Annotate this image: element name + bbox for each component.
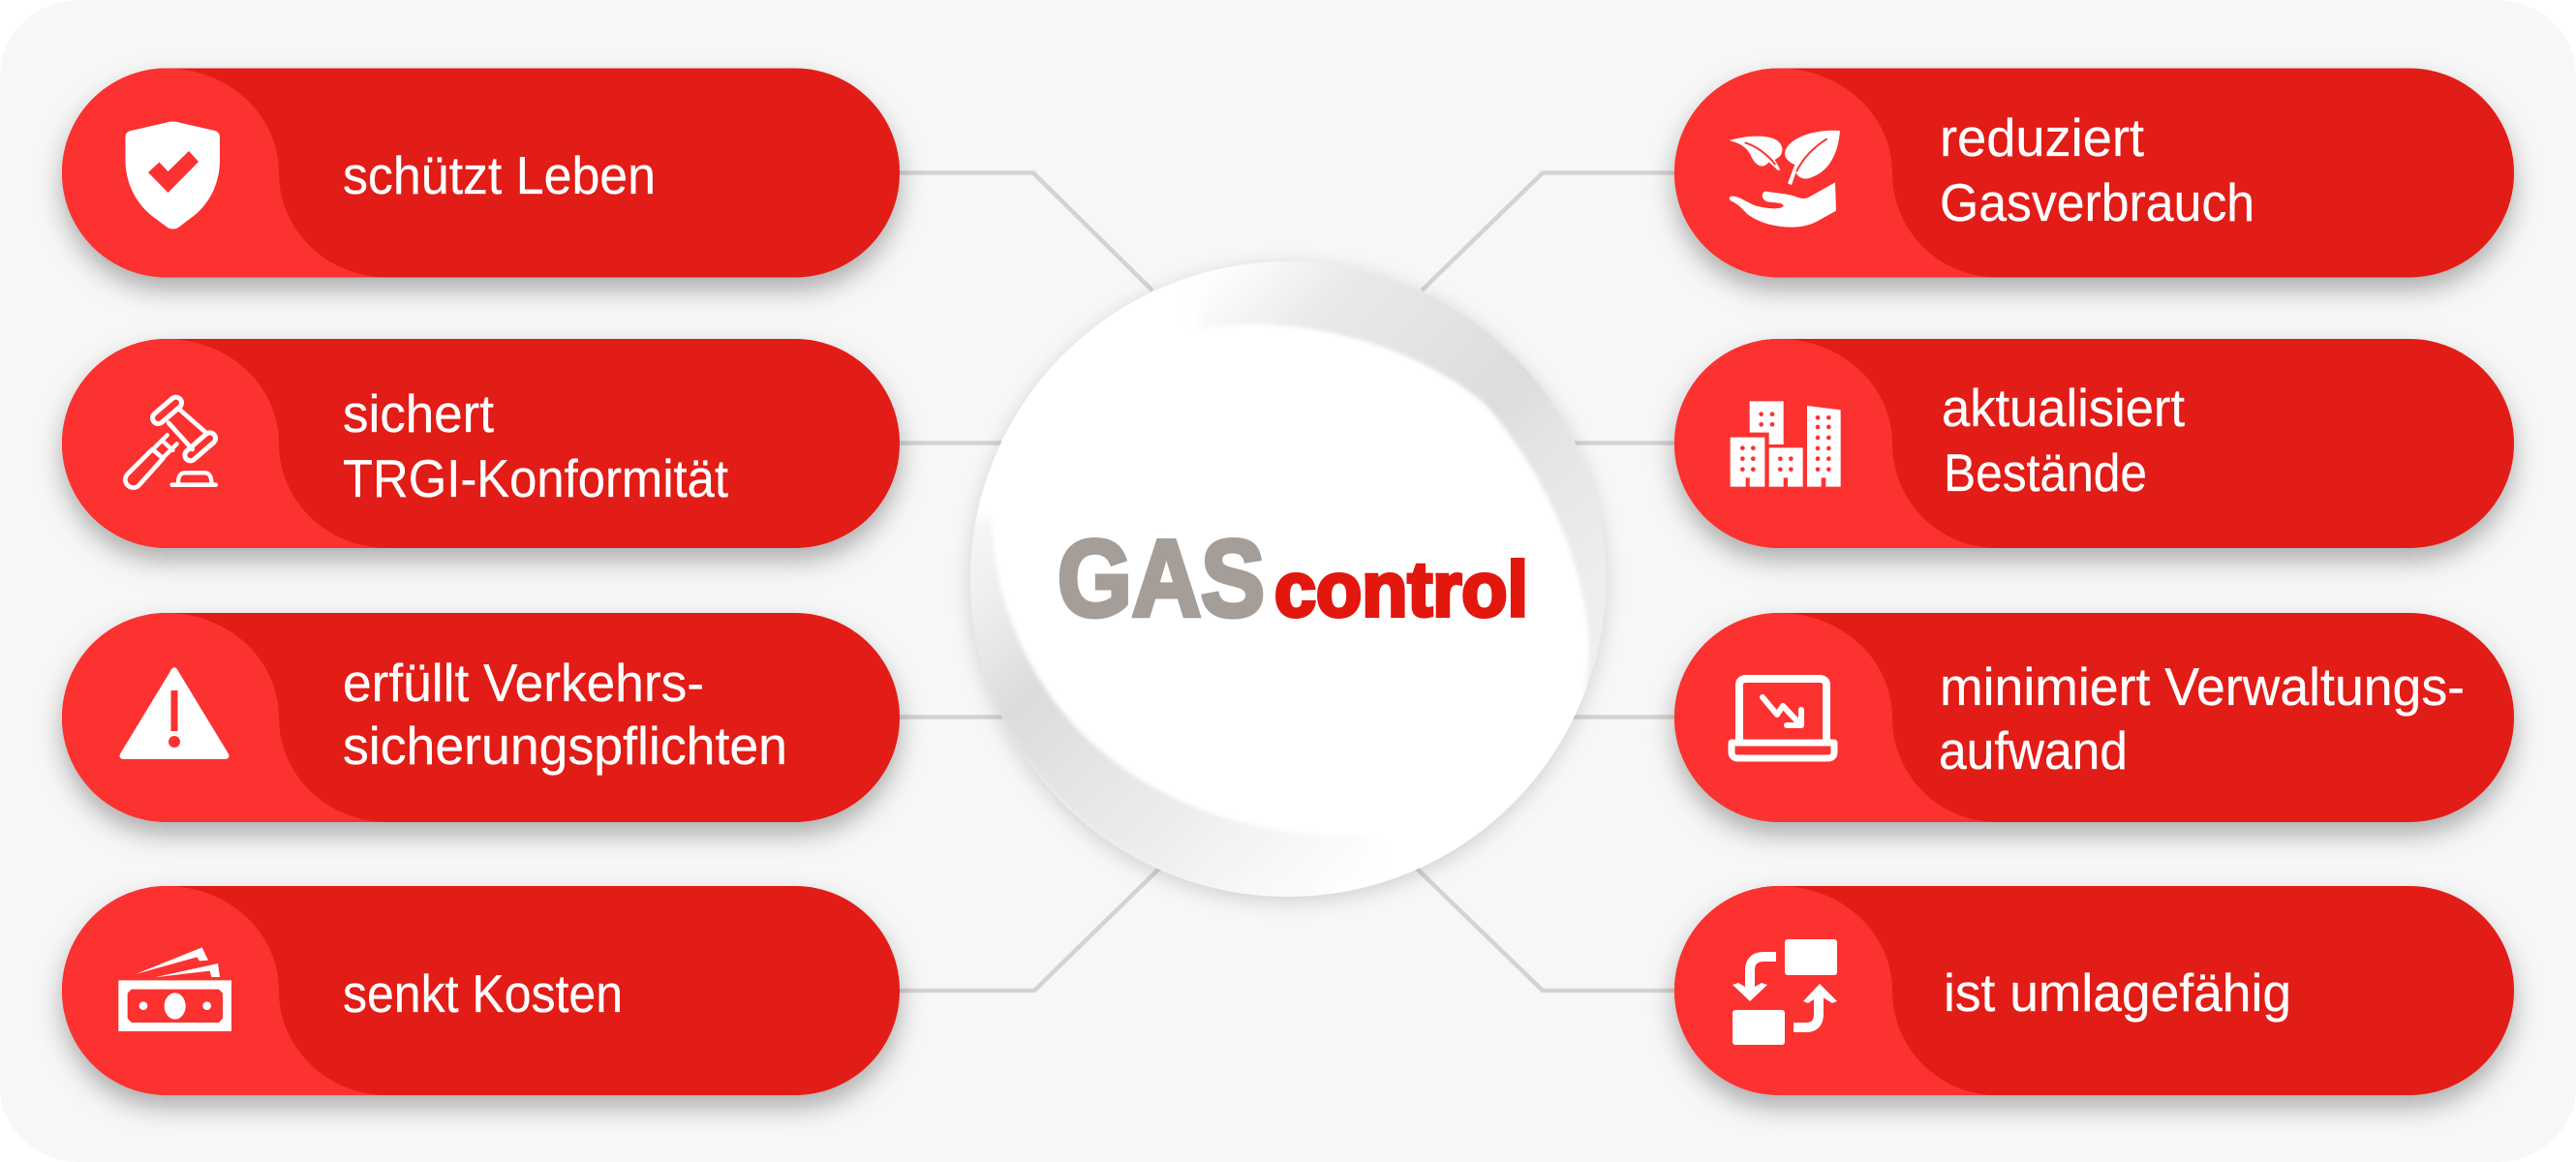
icon: banknotes <box>118 947 231 1031</box>
panel: aktualisiert Bestände <box>1674 339 2514 548</box>
panel: reduziert Gasverbrauch <box>1674 68 2514 277</box>
icon: laptop with falling chart <box>1732 679 1834 758</box>
label: reduziert <box>1940 107 2144 168</box>
panel: senkt Kosten <box>62 886 900 1095</box>
label <box>1939 657 2465 780</box>
logo: control <box>1274 546 1528 632</box>
connector lines <box>896 172 1680 991</box>
label: sicherungspflichten <box>343 716 787 776</box>
label: sichert <box>343 383 494 443</box>
icon: gavel <box>125 403 216 488</box>
panel: ist umlagefähig <box>1674 886 2514 1095</box>
label: Gasverbrauch <box>1940 172 2254 232</box>
label <box>1942 378 2185 503</box>
label: ist umlagefähig <box>1944 963 2291 1023</box>
panel: erfüllt Verkehrssicherungspflichten <box>62 613 900 822</box>
label: aufwand <box>1939 720 2128 780</box>
label: senkt Kosten <box>343 963 623 1024</box>
logo <box>1058 518 1528 639</box>
logo: GAS <box>1058 518 1265 639</box>
label: erfüllt Verkehrs- <box>343 653 704 713</box>
icon: warning triangle <box>120 667 229 759</box>
icon: exchange squares and arrows <box>1733 939 1837 1045</box>
panel: minimiert Verwaltungsaufwand <box>1674 613 2514 822</box>
label: aktualisiert <box>1942 378 2185 438</box>
label <box>1940 107 2254 232</box>
icon: plant in hand <box>1730 131 1840 228</box>
label: minimiert Verwaltungs- <box>1940 657 2465 717</box>
label: TRGI-Konformität <box>343 448 728 508</box>
icon: buildings <box>1731 401 1841 487</box>
label <box>343 383 728 508</box>
label: Bestände <box>1944 443 2147 503</box>
label <box>343 653 787 776</box>
icon: shield with check <box>126 122 220 229</box>
panel: sichert TRGI-Konformität <box>62 339 900 548</box>
panel: schützt Leben <box>62 68 900 277</box>
central disc with logo <box>963 259 1613 909</box>
label: schützt Leben <box>343 145 656 205</box>
